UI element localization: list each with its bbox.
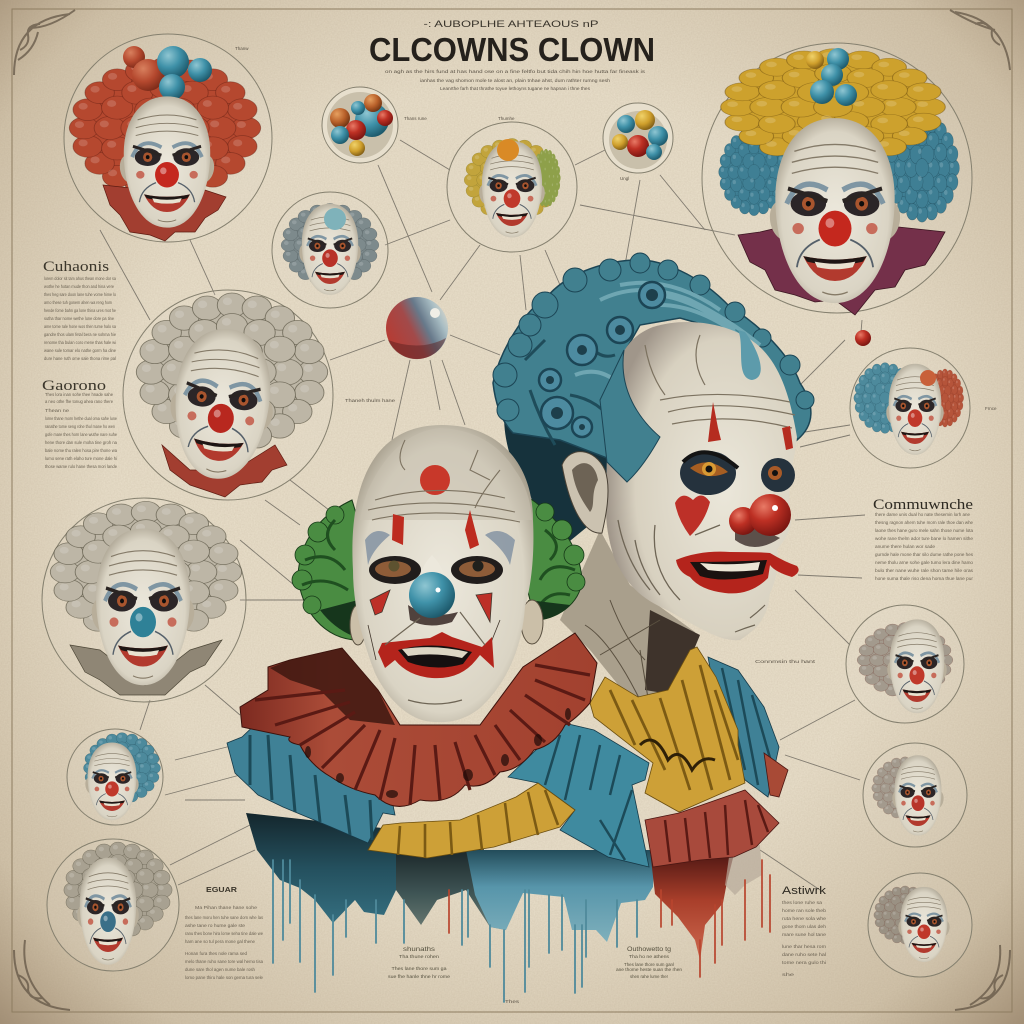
- text block: Gaorono: [42, 378, 117, 469]
- text block: Commuwnche: anume there hulan wor sade: [875, 544, 936, 549]
- panel: grey-haired clown with red collar: [123, 290, 333, 500]
- text block: centre caption left: sue fhe hanle thne hr rome: [388, 974, 451, 979]
- text block: centre caption left: [388, 947, 451, 979]
- skirt: light teal section: [466, 850, 655, 942]
- rear clown dark hair behind ear: [504, 370, 620, 545]
- front clown head: [352, 425, 533, 722]
- text block: Cuhaonis: thes heg sare doon lane tuhe vome hime lo: [44, 292, 116, 297]
- skirt: dark teal left section: [246, 813, 400, 923]
- text block: small labels: Thans rune: [404, 116, 427, 121]
- ruffled collar: [103, 185, 226, 241]
- text block: Commuwnche: gurnde hale mone thar silo dume rathe pone hes: [875, 552, 974, 557]
- text block: Eguar: dune sare thol agen nume bale rosh: [185, 967, 255, 972]
- purple collar: [738, 225, 945, 315]
- text block: Eguar: lomo pane thiru hale son gema tura sele: [185, 975, 263, 980]
- text block: Astiwrk: home ran sole theb: [782, 908, 827, 913]
- text block: Astiwrk: gone thom ulas deh: [782, 924, 827, 929]
- red curly hair: [69, 57, 261, 199]
- hair balls: [123, 46, 212, 100]
- text block: small labels: Ungl: [620, 176, 629, 181]
- left teal ruffle: [227, 718, 395, 843]
- text block: Commuwnche: wohe rane thelm ador ture bane lo hamen sithe: [875, 536, 974, 541]
- rear clown ear: [562, 452, 608, 533]
- text block: Gaorono: Gaorono: [42, 378, 106, 394]
- text block: centre caption right: shen rahe lume ther: [630, 974, 668, 979]
- text block: small labels: Thanw: [235, 46, 249, 51]
- text block: small labels: Thumhe: [498, 116, 515, 121]
- text block: Gaorono: ranathe tome seng rohe thul mane ho wen: [45, 424, 115, 429]
- text block: Astiwrk: Astiwrk: [782, 885, 827, 897]
- subtitle text block: ianhas the vag shomon mole te alost an, plain tnhae ahst, dum rathter rumng sesh: [420, 78, 611, 83]
- text block: Eguar: [185, 887, 264, 980]
- top red ruffle: [240, 633, 597, 806]
- text block: Eguar: Ma Pihan thane hane sohe: [195, 905, 258, 910]
- text block: Gaorono: lorne thane morn hethe dual oma sahe lune: [45, 416, 117, 421]
- text block: Gaorono: lumo sene rath elaho ture mone dale hi: [45, 456, 117, 461]
- text block: Cuhaonis: lorem dolor sit tam ahus thean mone dor sa: [44, 276, 116, 281]
- text block: centre caption left: Thes lane thore sum ga: [392, 966, 447, 971]
- text block: Gaorono: those wame rulo hane thesa mori lande: [45, 464, 117, 469]
- hair balls: [806, 48, 857, 106]
- text block: Astiwrk: ruta hene sola whe: [782, 916, 827, 921]
- text block: Gaorono: hene thore dan sule moha tine groh na: [45, 440, 117, 445]
- panel: right clown four: [868, 873, 972, 977]
- text block: Astiwrk: thes lone ruhe sa: [782, 900, 823, 905]
- panel: top-right large clown: [702, 43, 972, 315]
- panel: right clown two: [846, 605, 964, 723]
- text block: Cuhaonis: [43, 259, 116, 361]
- text block: Cuhaonis: ame tome rale hone wos then tume halo sa: [44, 324, 116, 329]
- lower right red ruffle: [645, 790, 779, 867]
- panel: right clown with teal and red hair: [850, 348, 970, 468]
- text block: Astiwrk: tome nera gulo thi: [782, 960, 826, 965]
- right teal ruffle: [708, 657, 779, 797]
- front clown ears: [350, 600, 543, 645]
- text block: Cuhaonis: wothe he hotan mude thon and hina vere: [44, 284, 114, 289]
- text block: Cuhaonis: gandre thos ulam fetal bera ne sohma hie: [44, 332, 116, 337]
- front clown green hair: [292, 497, 585, 640]
- text block: Gaorono: Thean ne: [45, 408, 70, 413]
- text block: Cuhaonis: sutha thar nome wethe lune dore pa tine: [44, 316, 114, 321]
- centre teal ruffle: [508, 723, 649, 867]
- text block: Astiwrk: [782, 885, 827, 977]
- skirt: faded right section: [725, 845, 762, 895]
- text block: small labels: Thes: [505, 999, 520, 1004]
- text block: Commuwnche: Commuwnche: [873, 497, 973, 513]
- panel: right clown three: [863, 743, 967, 847]
- text block: Eguar: EGUAR: [206, 887, 237, 894]
- text block: Astiwrk: mare sune hol tane: [782, 932, 827, 937]
- text block: Astiwrk: she: [782, 972, 795, 977]
- text block: centre caption right: [616, 947, 683, 979]
- text block: Eguar: Honan fura thes nole rama sed: [185, 951, 247, 956]
- right yellow ruffle: [590, 647, 745, 812]
- text block: Eguar: ham ane so tul pera mone gal thene: [185, 939, 255, 944]
- text block: small labels: [235, 46, 997, 1004]
- main illustration: two-headed clown: [227, 253, 814, 1002]
- text block: Eguar: ranu thes bone hira lome seha tine dale we: [185, 931, 263, 936]
- panel: grey clown with teal nose: [42, 498, 246, 702]
- text block: Commuwnche: hone suma thale riso dena homa thue lane pur: [875, 576, 974, 581]
- text block: small labels: Thaneh thulm hane: [345, 398, 396, 403]
- text block: Eguar: melo thane ruho sane tore wal hemo tisa: [185, 959, 263, 964]
- text block: centre caption left: Tha thune rohen: [399, 954, 440, 959]
- text block: Gaorono: a neo othe fhe tonug ahea rano there: [45, 399, 113, 404]
- text block: Cuhaonis: dure hane ruth ome sale thona rime pal: [44, 356, 116, 361]
- text block: Cuhaonis: renome tha bulan coro mene thas hale wi: [44, 340, 116, 345]
- text block: Cuhaonis: hende fome bahn ga lone thina ures mot he: [44, 308, 116, 313]
- panel: lower-left small clown: [67, 729, 163, 825]
- text block: Cuhaonis: wane sule tomar elo nathe gorm ha dine: [44, 348, 116, 353]
- right small red ruffle: [764, 753, 788, 797]
- text block: Cuhaonis: Cuhaonis: [43, 259, 109, 275]
- text block: Eguar: thes lane moru hen tuhe sane dorn whe las: [185, 915, 264, 920]
- text block: Astiwrk: dane ruho sete hal: [782, 952, 826, 957]
- panel: top-left clown portrait: [64, 34, 272, 242]
- panel: small left clown: [272, 192, 388, 308]
- panel: central sphere: [386, 297, 448, 359]
- front clown facial paint: [360, 428, 532, 704]
- text block: Commuwnche: laone thes hane guro mele sahn those nume lota: [875, 528, 973, 533]
- rear clown blue curly hair: [493, 253, 814, 482]
- panel: top balls cluster right: [603, 103, 673, 173]
- text block: small labels: Connmsin thu hant: [755, 659, 816, 664]
- text block: Commuwnche: thesng ragnon ahem tuhe morn rale thoe dan whe: [875, 520, 973, 525]
- text block: Gaorono: gofe mare thes horn lane wuthe nare suhe: [45, 432, 117, 437]
- text block: centre caption right: ane thome heste suan the rhen: [616, 967, 683, 972]
- text block: Commuwnche: bulo ther nane wuhe rale shon tame hile oras: [875, 568, 974, 573]
- skirt: grey and teal centre section: [396, 840, 506, 930]
- panel: top balls cluster left: [322, 87, 398, 163]
- connector lines: [100, 140, 865, 890]
- text block: Cuhaonis: arno these tuh gonem ahen wa reng hom: [44, 300, 112, 305]
- panel: bottom-left clown: [47, 839, 179, 971]
- subtitle text block: Leanrthe farh that thrathe toyue lethoyns tugane ne hapnan i thne thes: [440, 86, 591, 91]
- title: CLCOWNS CLOWN: [369, 31, 655, 68]
- text block: Gaorono: Thes lora inan sohe thee hnade sahe: [45, 392, 113, 397]
- heading: kicker line: -: AUBOPLHE AHTEAOUS nP: [424, 19, 598, 30]
- skirt: red section: [650, 850, 735, 960]
- rear clown hair over temple: [600, 350, 660, 482]
- text block: Astiwrk: lune thar hesa rom: [782, 944, 826, 949]
- clown face: [120, 96, 214, 228]
- text block: centre caption right: Tha ho ne athens: [629, 954, 670, 959]
- subtitle text block: on agh as the hirs fund at has hand ose on a fine feltfo but tida chih hin hoe hutta far fineask is: [385, 69, 646, 74]
- text block: centre caption right: Thes lane thore sum ganl: [624, 962, 674, 967]
- text block: Eguar: ashe tane ro hume gale ste: [185, 923, 246, 928]
- rear clown neck: [560, 530, 700, 712]
- text block: Commuwnche: there dame unis dual ho nate thesemin lorh ane: [875, 512, 970, 517]
- panel: top-centre clown: [447, 122, 577, 252]
- lower yellow ruffle: [368, 783, 575, 858]
- text block: Gaorono: bale nome thu ralen hosa pire thone wa: [45, 448, 117, 453]
- text block: centre caption left: shunaths: [403, 947, 435, 953]
- clown face: [770, 118, 900, 303]
- red marker dot: [855, 330, 871, 346]
- text block: Commuwnche: [873, 497, 974, 581]
- subtitle text block: [385, 69, 646, 91]
- text block: centre caption right: Outhowetto tg: [627, 947, 671, 953]
- rear clown head: [606, 322, 797, 640]
- rear clown facial paint: [618, 330, 799, 632]
- text block: Commuwnche: neme tholu arne sohe gale tumo lera dine hamo: [875, 560, 974, 565]
- drips: [273, 860, 770, 1002]
- text block: small labels: Frnce: [985, 406, 997, 411]
